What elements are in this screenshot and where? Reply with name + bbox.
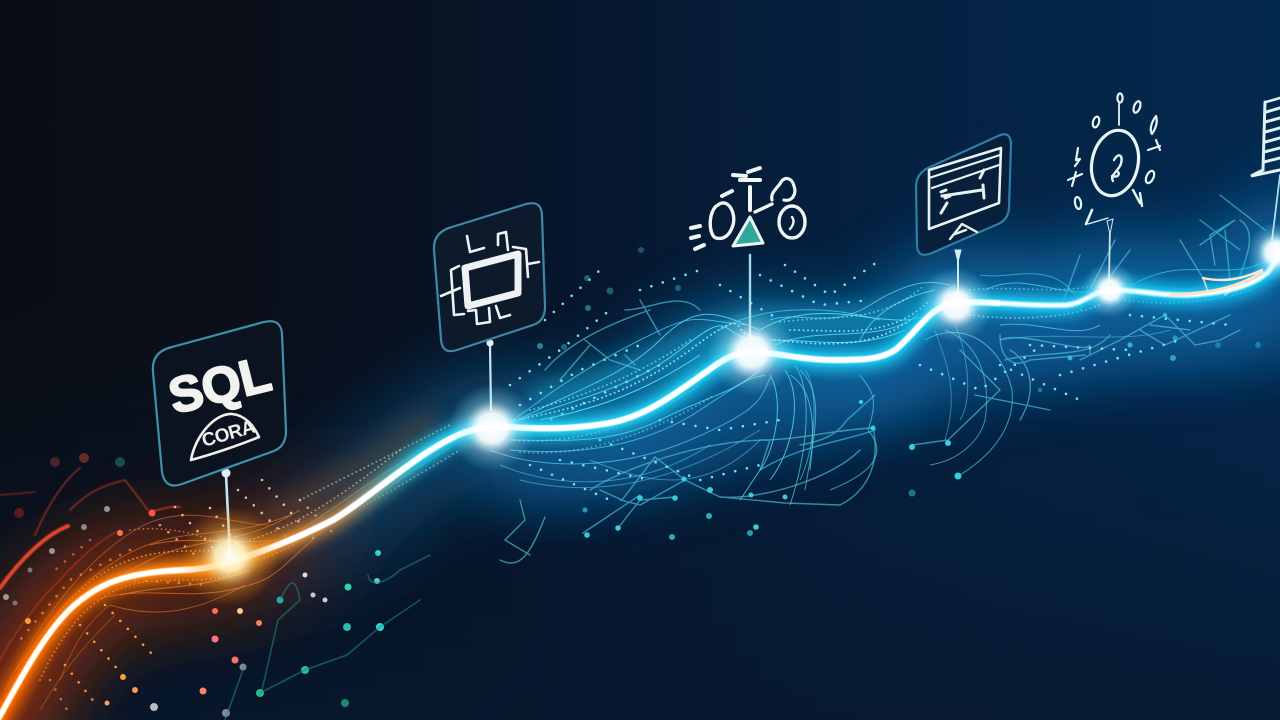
icon: server stack at right edge: [1251, 98, 1280, 176]
fine filaments: [490, 260, 1268, 505]
glowing main data stream: [0, 250, 1278, 720]
blue network around the stream: [300, 195, 1268, 563]
icon: insight dial with surrounding symbols: [1068, 94, 1160, 224]
node flares: [180, 222, 1280, 606]
large teal nodes: [537, 247, 1261, 540]
dense particle band along the curve: [300, 285, 1250, 540]
label: SQL: SQL: [163, 345, 276, 425]
wider circuit traces: [500, 195, 1265, 563]
connector pins: [222, 175, 1280, 555]
icon: dashboard window: [929, 148, 1001, 239]
dotted links: [510, 260, 1230, 500]
warm network on the left: [0, 445, 450, 720]
warm filaments: [5, 445, 450, 710]
icon: chip: [441, 232, 539, 324]
card: processor chip: [434, 203, 545, 351]
icon: brain-like database shape: [191, 414, 259, 460]
scattered warm and teal nodes: [3, 453, 384, 717]
icon: data science flask cluster: [691, 168, 805, 249]
icon: brain-like database shape: CORA: [200, 417, 258, 452]
teal traces near the bottom: [225, 555, 430, 720]
warm speckle hugging the stream: [10, 450, 420, 690]
ambient glow along the data stream: [0, 250, 1280, 720]
red circuit traces: [0, 468, 180, 660]
warm branch near the right edge: [1170, 272, 1262, 295]
warm dotted links: [20, 480, 335, 715]
card: SQL database: [153, 321, 286, 486]
card: analytics dashboard: [916, 134, 1011, 255]
